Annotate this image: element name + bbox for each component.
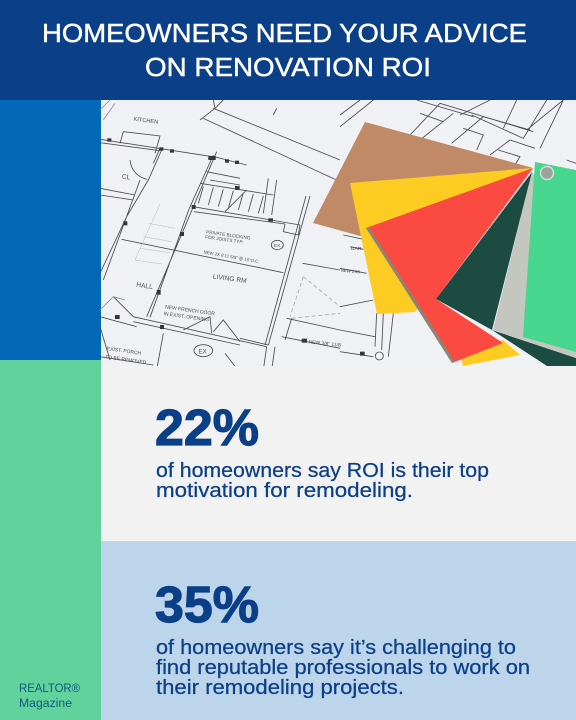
title [42,18,527,82]
stat description: motivation for remodeling. [156,480,413,502]
blueprint floor plan: HALL [136,282,153,291]
blueprint floor plan: PRIVATE BLOCKING [206,229,251,241]
swatch: green [523,162,576,352]
blueprint floor plan: EX [274,243,281,248]
swatch: yellow lower corner [459,340,520,366]
blueprint floor plan: NEW 2X 8 11 5/8" @ 16"O.C. [203,249,260,264]
header band [0,0,576,100]
panel: 35% stat [101,541,576,720]
title: HOMEOWNERS NEED YOUR ADVICE [42,18,527,48]
photo: blueprints and colour swatches [100,100,576,370]
blueprint floor plan: TO BE REMOVED [105,354,147,366]
blueprint floor plan: KITCHEN [133,117,158,126]
stat description: of homeowners say ROI is their top [156,460,489,482]
swatch: dark green [436,172,532,330]
blueprint floor plan [100,100,341,370]
swatch: yellow [350,168,533,314]
window elevation drawings: GAR [351,246,362,252]
panel: 22% stat [101,366,576,541]
swatch: dark green lower edge [492,330,576,366]
swatch: red edge [366,227,455,363]
stat description: their remodeling projects. [156,677,404,699]
blueprint floor plan: IN EXIST. OPENING [163,311,210,323]
stat description: of homeowners say it’s challenging to [156,637,516,659]
blueprint floor plan: EX [199,349,207,355]
swatch hole [540,166,554,180]
stat description: find reputable professionals to work on [156,657,530,679]
source credit: Magazine [19,698,72,710]
swatch: brown [313,122,533,236]
stat description [156,460,489,502]
stat description [156,637,530,699]
blueprint floor plan: NEW FRENCH DOOR [165,304,216,317]
swatch: red [366,168,533,363]
blueprint floor plan: CL [121,173,131,182]
blueprint floor plan: EXIST. PORCH [106,346,142,357]
swatch: grey [493,172,576,358]
stat number: 35% [155,576,259,633]
title: ON RENOVATION ROI [145,52,431,82]
stat number: 22% [155,399,259,456]
source credit: REALTOR® [19,683,81,695]
left green column [0,360,101,720]
left blue column [0,100,101,360]
blueprint floor plan: LIVING RM [212,273,247,285]
window elevation drawings: NEW 2X8 [341,268,361,274]
blueprint floor plan: FOR JOISTS TYP. [205,234,244,245]
window elevation drawings [340,100,576,360]
source credit [19,683,81,710]
colour swatch fan [313,122,576,366]
blueprint floor plan: NEW 3/8" 11/8 [308,339,341,349]
